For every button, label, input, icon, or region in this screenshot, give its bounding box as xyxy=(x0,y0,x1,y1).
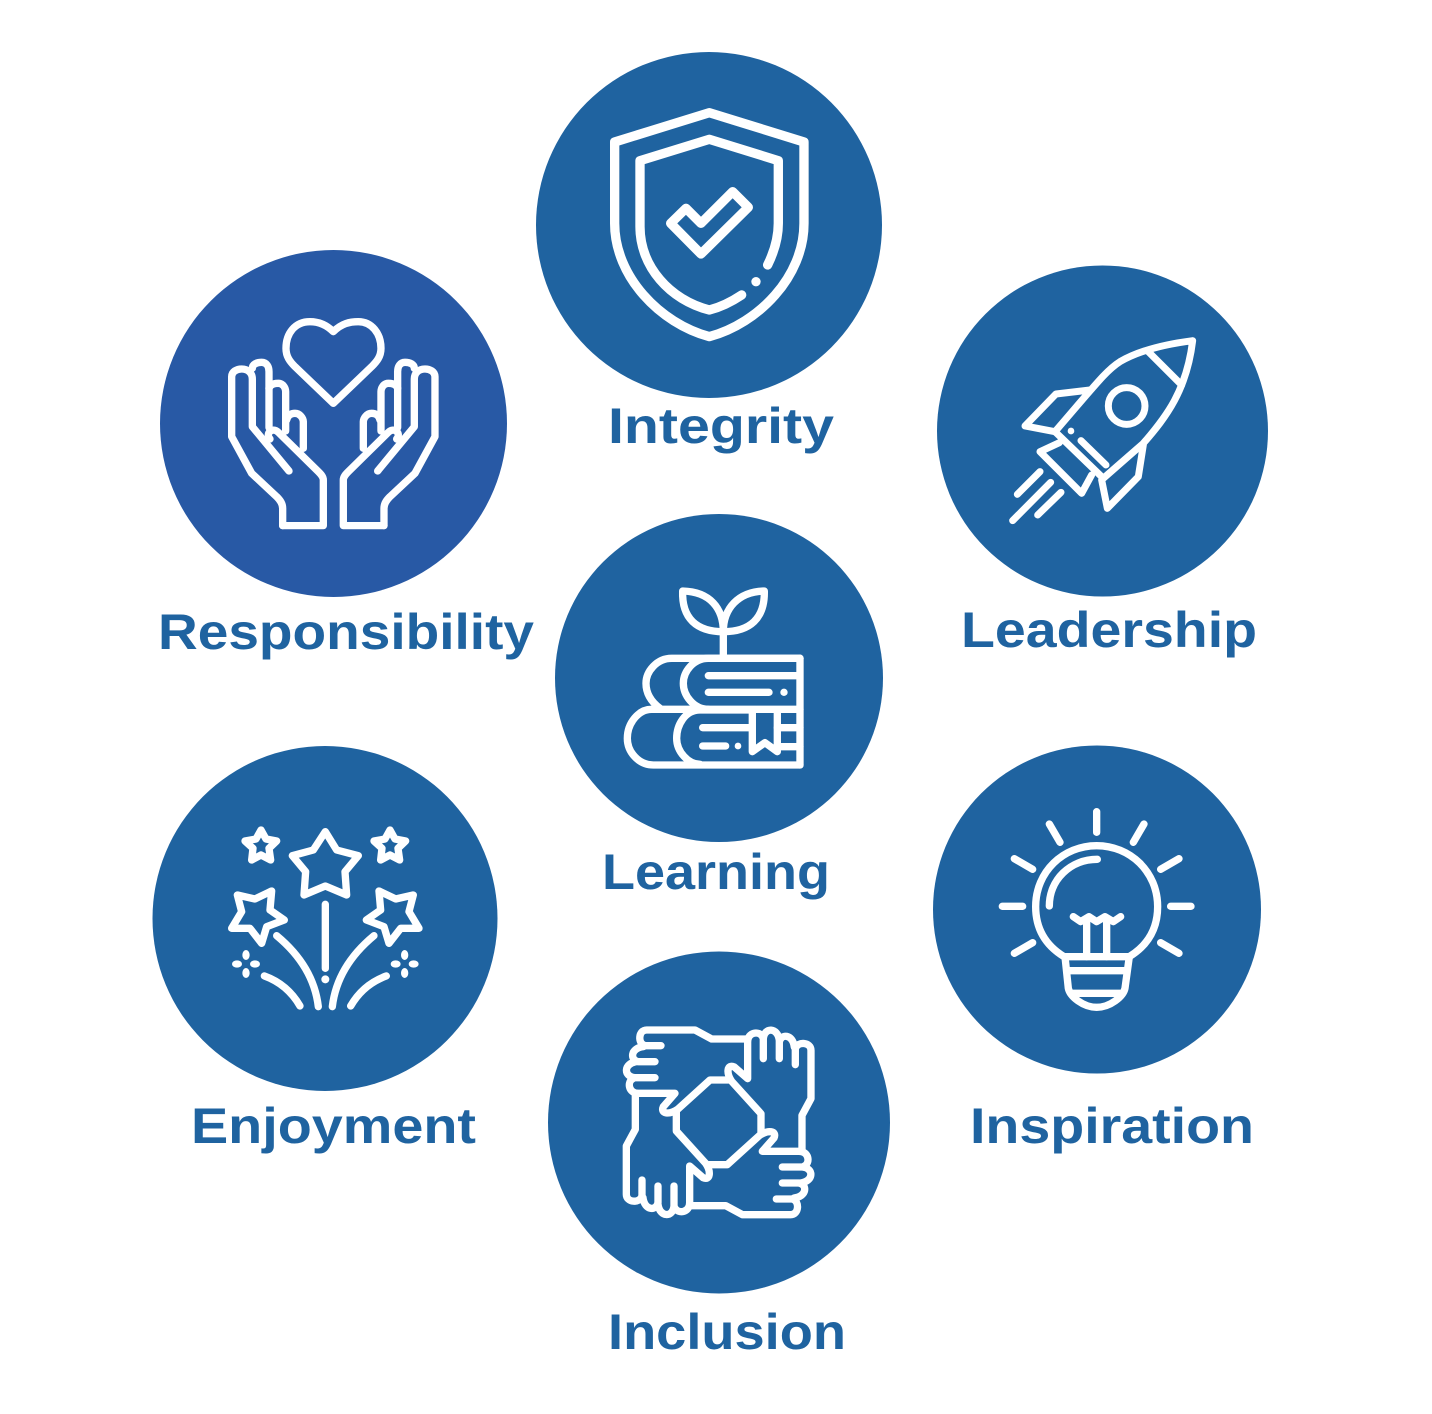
circle: Enjoyment xyxy=(152,746,498,1091)
icon: four linked hands xyxy=(626,1030,811,1215)
label: Integrity: Integrity xyxy=(608,398,834,454)
icon: fireworks xyxy=(232,830,419,1007)
label: Leadership: Leadership xyxy=(961,602,1257,658)
icon: light bulb xyxy=(1002,812,1191,1007)
label: Learning: Learning xyxy=(602,844,830,900)
icon: shield with check xyxy=(615,113,804,337)
panel: Enjoyment xyxy=(152,746,498,1154)
label: Inspiration: Inspiration xyxy=(970,1098,1254,1154)
icon: hands holding heart xyxy=(232,322,435,526)
panel: Inclusion xyxy=(548,952,890,1360)
panel: Learning xyxy=(555,514,883,900)
icon: books with sprout xyxy=(627,591,800,765)
panel: Leadership xyxy=(937,266,1268,658)
circle: Learning xyxy=(555,514,883,842)
circle: Responsibility xyxy=(160,250,507,597)
circle: Integrity xyxy=(536,52,882,398)
panel: Integrity xyxy=(536,52,882,454)
panel: Inspiration xyxy=(933,746,1261,1154)
label: Responsibility: Responsibility xyxy=(158,604,534,660)
panel: Responsibility xyxy=(158,250,534,660)
label: Inclusion: Inclusion xyxy=(608,1304,846,1360)
icon: rocket xyxy=(1013,341,1193,521)
circle: Inspiration xyxy=(933,746,1261,1074)
circle: Inclusion xyxy=(548,952,890,1294)
label: Enjoyment: Enjoyment xyxy=(191,1098,476,1154)
circle: Leadership xyxy=(937,266,1268,596)
